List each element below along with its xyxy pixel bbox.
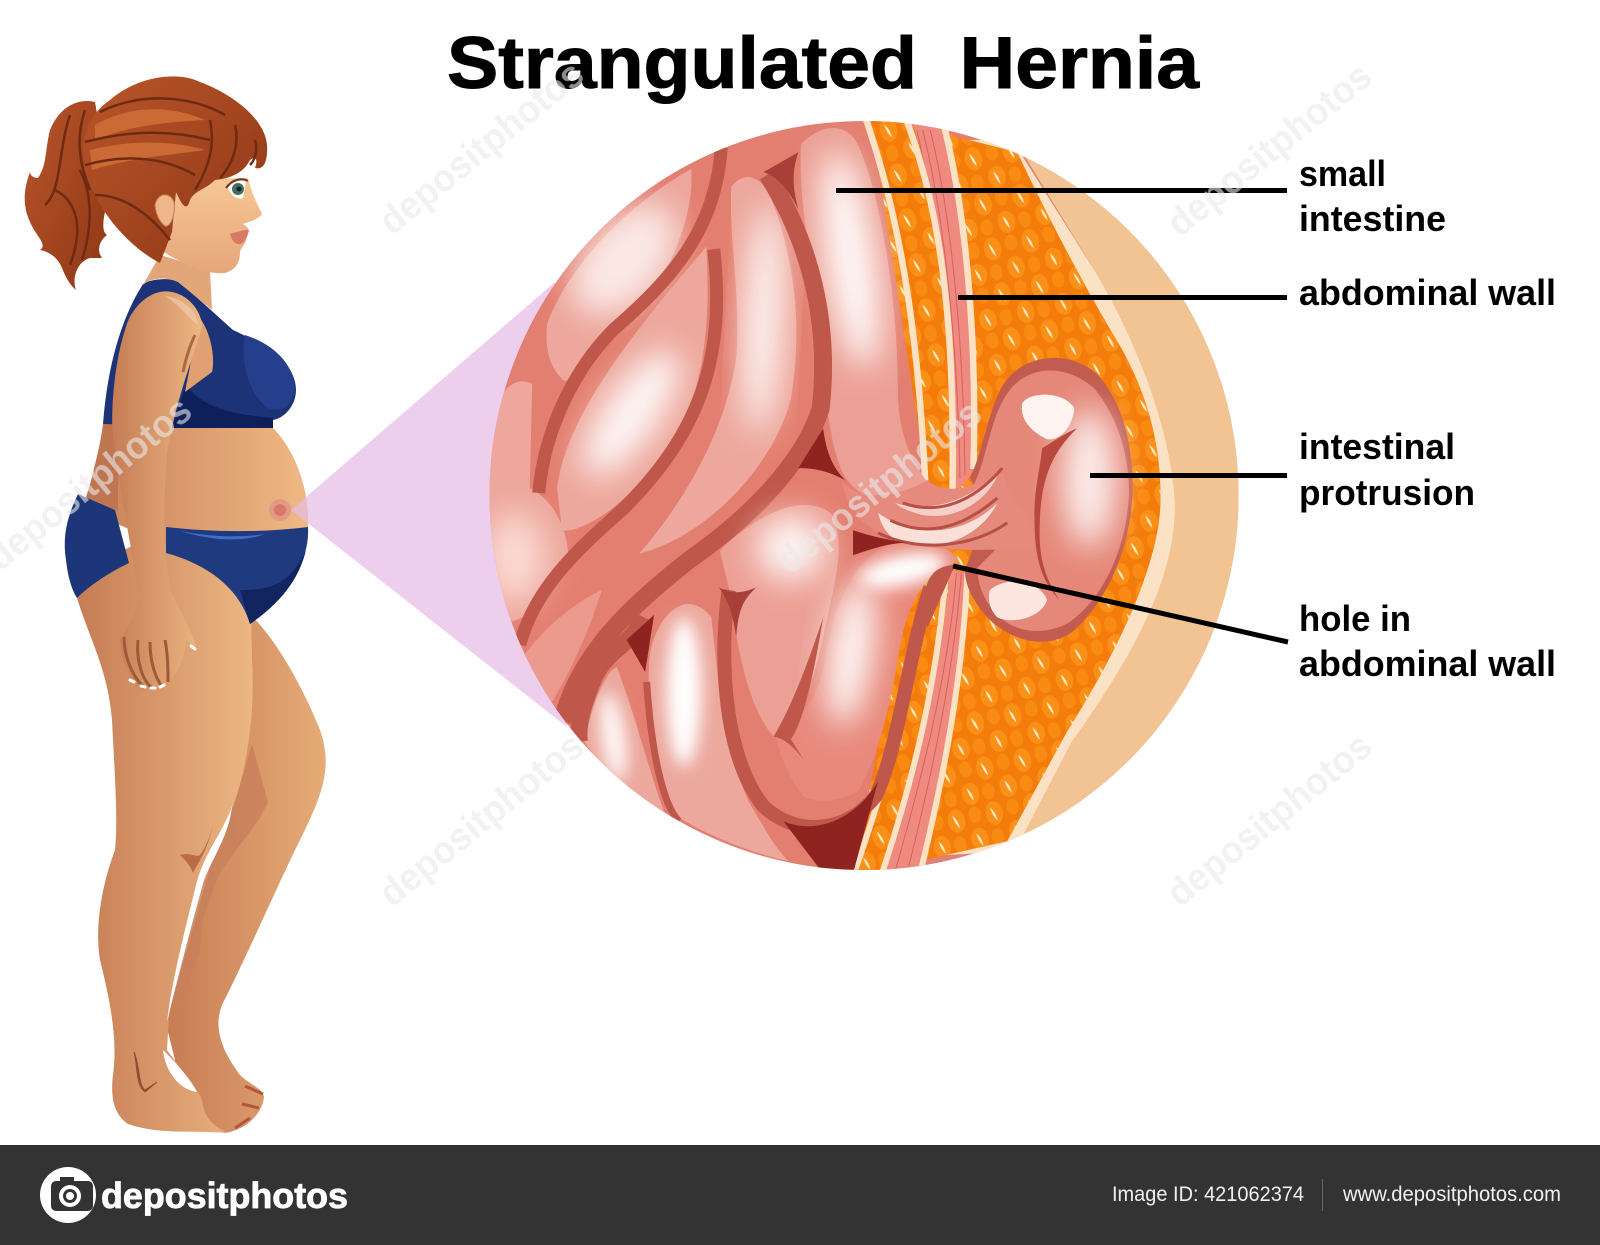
watermarks (0, 53, 1380, 915)
watermarks: depositphotos (371, 725, 592, 915)
label: small intestine: intestine (1299, 198, 1446, 239)
lobe: middle left (557, 247, 708, 531)
label: abdominal wall: abdominal wall (1299, 272, 1556, 313)
label: hole in abdominal wall: hole in (1299, 598, 1411, 639)
ponytail (25, 101, 110, 290)
gap between the feet (163, 1050, 197, 1092)
chest skin (185, 318, 213, 392)
lobe: lower centre (720, 505, 839, 737)
eye (226, 179, 248, 198)
dark fold: long diagonal (562, 175, 823, 722)
logo camera badge (40, 1167, 96, 1223)
neck junction shadow (853, 530, 908, 555)
near leg (77, 530, 253, 1133)
wall linings upper (864, 115, 974, 489)
fat cells (853, 115, 1160, 876)
watermarks: depositphotos (371, 53, 592, 243)
muscle wall lower (885, 570, 966, 874)
hair highlights (90, 109, 205, 170)
hernia highlight right (1062, 408, 1117, 548)
lobe: lower-left ribbon (525, 590, 602, 702)
dermis band (928, 140, 1175, 856)
logo wordmark: depositphotos (101, 1175, 348, 1216)
lobe: far left (485, 381, 569, 622)
woman figure in side profile (25, 76, 326, 1133)
watermarks: depositphotos (769, 392, 990, 582)
watermarks: depositphotos (1159, 55, 1380, 245)
torso skin (85, 424, 308, 545)
arm (112, 291, 202, 693)
zoom cone (291, 282, 567, 727)
fingers (124, 637, 168, 688)
label: intestinal protrusion: intestinal (1299, 426, 1455, 467)
far leg shadow (172, 744, 268, 1011)
toes (235, 1086, 263, 1128)
skin outer layer (1024, 158, 1238, 834)
neck (143, 255, 212, 310)
watermarks: depositphotos (1159, 725, 1380, 915)
label: intestinal protrusion: protrusion (1299, 472, 1475, 513)
briefs dark band (240, 550, 306, 624)
lobe: bottom centre (649, 604, 788, 861)
footer divider (1322, 1179, 1323, 1211)
gap between the legs (167, 806, 232, 1022)
face (160, 178, 262, 273)
dark fold: lower-left band (579, 617, 644, 742)
hernia lower knob (989, 581, 1047, 620)
muscle wall upper (912, 122, 974, 488)
intestine base (486, 117, 1242, 874)
arm crease (183, 335, 195, 372)
hair strands (85, 98, 256, 240)
pointer lines (836, 190, 1288, 642)
shoulder sheen (165, 296, 198, 325)
bra lower shade (172, 385, 273, 428)
navel marker (269, 499, 291, 521)
fat layer (853, 115, 1160, 876)
knee crease (180, 822, 213, 873)
hernia top knob (1022, 395, 1074, 439)
dark fold: lower tick (773, 617, 823, 759)
label: intestinal protrusion (1299, 426, 1475, 513)
deep shadow: bottom (783, 781, 878, 874)
footer bar (0, 1145, 1600, 1245)
hernia sac outline (965, 358, 1133, 642)
hernia loop body (972, 370, 1129, 631)
dark fold: top notch (764, 152, 798, 209)
front briefs (166, 527, 308, 624)
dark fold: centre wedge (798, 428, 846, 481)
magnified cross-section circle (489, 121, 1239, 870)
lobe: upper right column (801, 128, 930, 505)
dark fold: left sweep (539, 147, 721, 493)
bra highlight (244, 335, 295, 409)
lobe: top left (547, 169, 697, 381)
bra (103, 279, 296, 428)
dark fold: bottom left sweep (647, 682, 679, 821)
fingernails (130, 646, 195, 688)
ankle crease (134, 1052, 157, 1092)
dark fold: lower notch (719, 588, 756, 637)
strangulated neck folds (841, 467, 1008, 550)
hole in wall shadow (926, 565, 954, 627)
lobe: tall centre (639, 177, 796, 554)
far leg (165, 610, 326, 1133)
title: Strangulated Hernia (447, 23, 1200, 104)
briefs highlight (180, 531, 265, 539)
ear (155, 195, 174, 226)
lips (230, 230, 249, 244)
back shadow (85, 424, 118, 510)
dark fold: centre sweep (520, 249, 717, 645)
label: hole in abdominal wall (1299, 598, 1556, 684)
hernia inner fold (1034, 428, 1077, 600)
wall linings lower (854, 570, 967, 874)
label: hole in abdominal wall: abdominal wall (1299, 643, 1556, 684)
ponytail strands (45, 110, 90, 265)
lobe: bottom left small (584, 667, 664, 811)
website url: www.depositphotos.com (1342, 1183, 1561, 1206)
deep shadow: small wedge (627, 615, 654, 672)
main hair (83, 76, 267, 263)
label: small intestine: small (1299, 153, 1386, 194)
dark fold: lower U (724, 588, 930, 827)
back briefs (65, 494, 129, 598)
label: small intestine (1299, 153, 1446, 239)
image id: Image ID: 421062374 (1112, 1183, 1304, 1206)
lobe: lower right (776, 540, 958, 801)
